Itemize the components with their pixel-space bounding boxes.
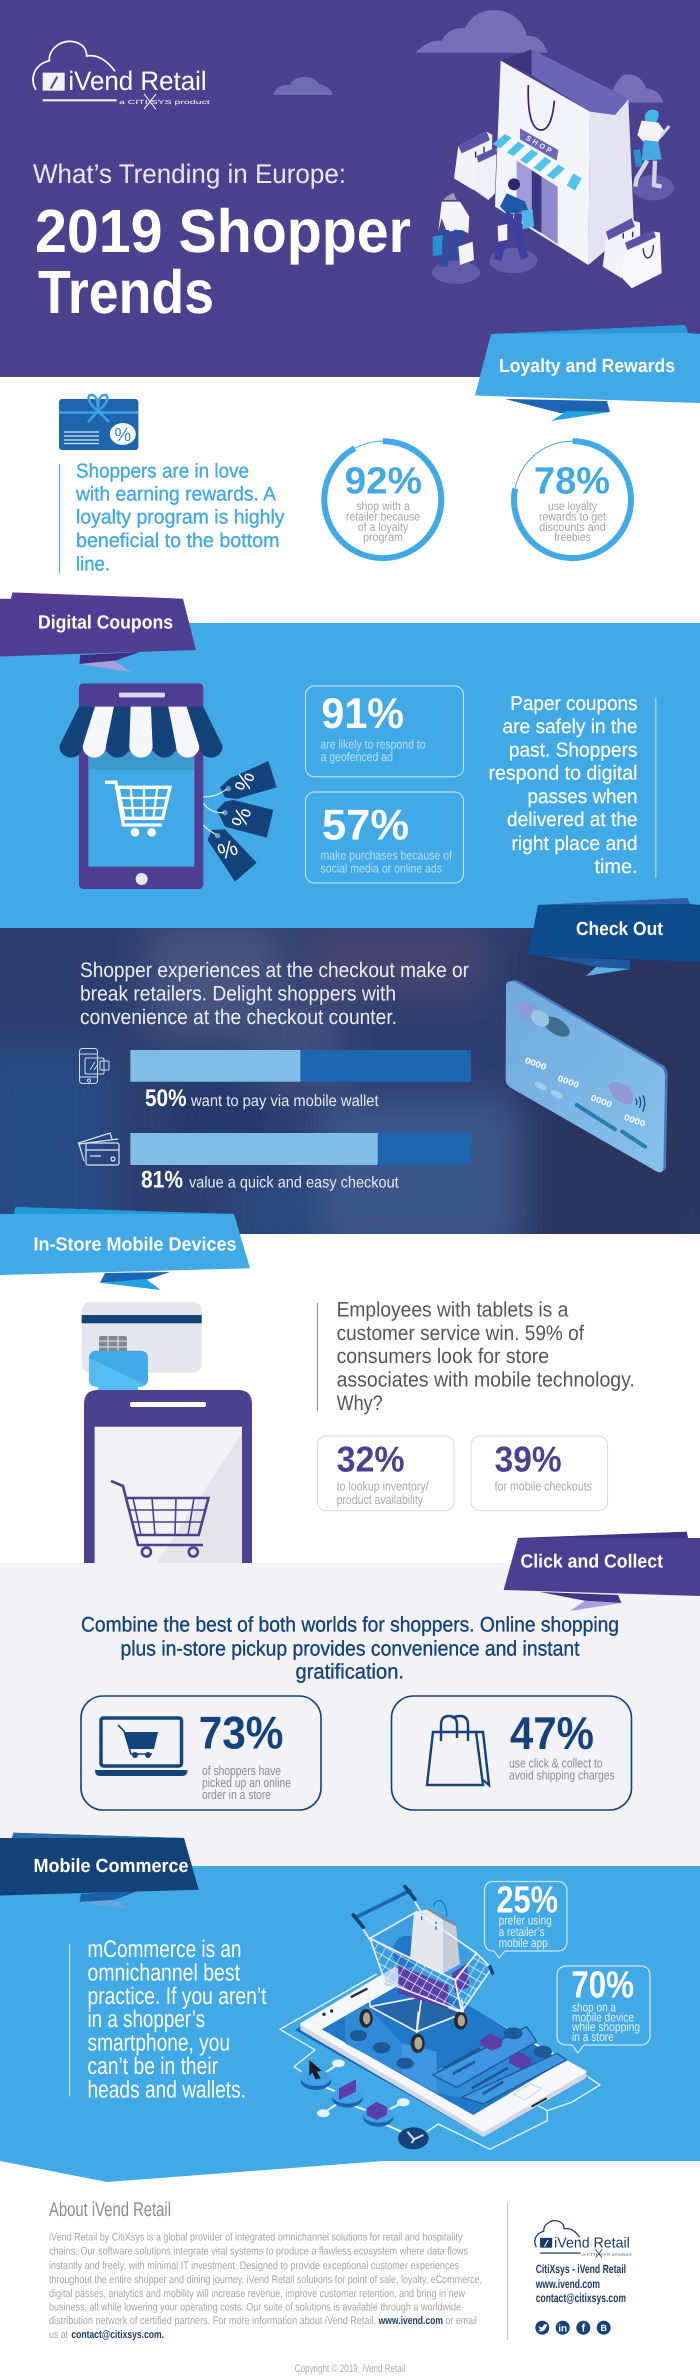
text block: checkout intro: Shopper experiences at the checkout make or	[80, 959, 469, 982]
icon: storefront phone with coupon tags: %	[230, 768, 259, 795]
ribbon: mobile commerce: Mobile Commerce	[34, 1856, 188, 1877]
stat box: 57%: make purchases because of	[320, 849, 452, 863]
icons: social media: f	[581, 2323, 585, 2335]
stat box: 47%	[392, 1696, 632, 1810]
stat box: 32%: 32%	[337, 1439, 405, 1480]
icon: storefront phone with coupon tags: %	[226, 804, 256, 831]
panel: digital coupons	[0, 592, 700, 929]
text block: loyalty intro	[60, 460, 284, 575]
illustration: credit card: 0000	[589, 1092, 613, 1109]
bar chart: 81% quick checkout: 81%	[141, 1166, 183, 1193]
callout: 70%: 70%	[571, 1964, 634, 2006]
text block: contact	[535, 2262, 626, 2305]
text block: paper coupons: are safely in the	[502, 716, 638, 738]
ribbon: in-store mobile devices	[0, 1207, 250, 1290]
text block: mCommerce: mCommerce is an	[88, 1936, 242, 1963]
stat ring: 92%: of a loyalty	[358, 520, 408, 534]
text block: contact: contact@citixsys.com	[536, 2291, 626, 2305]
illustration: credit card: 0000	[556, 1073, 580, 1090]
logo: iVend Retail	[33, 41, 210, 109]
stat ring: 92%: shop with a	[356, 499, 410, 513]
illustration: shop bag store: SHOP	[524, 134, 553, 155]
cloud small	[273, 77, 333, 95]
bar chart: 50% mobile wallet	[130, 1050, 471, 1112]
stat ring: 78%: rewards to get	[539, 510, 607, 524]
stat ring: 78%: 78%	[534, 461, 610, 503]
text block: about paragraph: business, all while lowering your operating costs. Our suite of solutions is available through a worldwide	[49, 2302, 461, 2314]
stat ring: 92%: retailer because	[346, 510, 420, 524]
panel: click and collect	[0, 1532, 700, 1866]
icons: social media	[535, 2321, 611, 2335]
stat box: 73%: order in a store	[202, 1787, 271, 1802]
text block: mCommerce: can’t be in their	[88, 2053, 218, 2080]
ribbon: check out	[528, 898, 700, 976]
stat box: 73%: 73%	[199, 1706, 284, 1758]
stat ring: 92%	[324, 441, 441, 558]
title: Trends	[38, 258, 214, 326]
callout: 25%	[484, 1879, 567, 1958]
stat box: 73%: of shoppers have	[202, 1763, 281, 1778]
text block: mCommerce: in a shopper’s	[88, 2006, 205, 2033]
ribbon: loyalty and rewards: Loyalty and Rewards	[499, 356, 675, 377]
stat box: 39%: for mobile checkouts	[495, 1479, 592, 1494]
text block: about paragraph: distribution network of certified partners. For more information about iVend Retail,	[49, 2315, 376, 2327]
stat ring: 78%: freebies	[554, 530, 591, 544]
illustration: phone with card and cart	[82, 1302, 252, 1563]
text block: mCommerce	[70, 1936, 267, 2104]
stat box: 47%: use click & collect to	[509, 1755, 603, 1770]
callout: 70%: in a store	[572, 2030, 614, 2044]
panel: check out	[0, 898, 700, 1255]
text block: about paragraph: instantly and freely, with minimal IT investment. Designed to provide exceptional customer experiences	[49, 2260, 459, 2272]
stat ring: 92%: 92%	[345, 461, 422, 503]
text block: combine best of both worlds	[81, 1614, 619, 1684]
callout: 70%	[557, 1964, 650, 2053]
stat box: 73%	[81, 1696, 321, 1810]
stat box: 91%: 91%	[321, 690, 404, 738]
illustration: credit card: 0000	[524, 1055, 548, 1072]
text block: checkout intro: convenience at the checkout counter.	[80, 1006, 397, 1029]
stat box: 91%	[306, 686, 464, 777]
stat box: 39%	[471, 1436, 608, 1511]
bar chart: 50% mobile wallet: want to pay via mobile wallet	[190, 1093, 379, 1110]
text block: paper coupons: Paper coupons	[510, 693, 638, 715]
stat ring: 78%: discounts and	[539, 520, 606, 534]
text block: paper coupons: past. Shoppers	[509, 739, 638, 761]
text block: paper coupons: delivered at the	[507, 809, 638, 831]
icon: gift card	[59, 395, 138, 450]
text block: about paragraph: or email	[446, 2315, 477, 2327]
text block: paper coupons	[488, 693, 656, 878]
text block: about paragraph: chains. Our software solutions integrate vital systems to produce a flawless ecosystem where data flows	[49, 2246, 468, 2258]
text block: employees with tablets: customer service win. 59% of	[337, 1322, 584, 1345]
subtitle: What’s Trending in Europe:	[33, 159, 346, 189]
text block: mCommerce: smartphone, you	[88, 2030, 230, 2057]
stat box: 32%: product availability	[337, 1492, 423, 1507]
illustration: credit card	[506, 980, 668, 1172]
text block: combine best of both worlds: plus in-store pickup provides convenience and instant	[120, 1637, 580, 1660]
text block: loyalty intro: loyalty program is highly	[76, 506, 284, 528]
stat box: 57%: social media or online ads	[320, 861, 442, 875]
stat box: 47%: avoid shipping charges	[509, 1767, 615, 1782]
bar chart: 81% quick checkout: value a quick and easy checkout	[189, 1174, 399, 1191]
stat ring: 78%	[514, 441, 631, 558]
ribbon: digital coupons	[0, 592, 196, 672]
text block: mCommerce: omnichannel best	[88, 1959, 240, 1986]
icon: storefront phone with coupon tags	[59, 683, 277, 889]
text block: loyalty intro: with earning rewards. A	[75, 484, 277, 506]
stat box: 32%	[318, 1436, 454, 1511]
panel: loyalty and rewards	[59, 325, 700, 575]
stat ring: 78%: use loyalty	[548, 499, 597, 513]
bar chart: 81% quick checkout	[130, 1133, 471, 1193]
text block: about paragraph: www.ivend.com	[378, 2315, 443, 2327]
logo: iVend Retail: a CITI SYS product	[119, 99, 210, 105]
stat box: 32%: to lookup inventory/	[337, 1479, 429, 1494]
icon: shopping bag	[427, 1716, 489, 1785]
text block: paper coupons: right place and	[512, 833, 638, 855]
callout: 70%: mobile device	[572, 2011, 634, 2025]
text block: loyalty intro: line.	[76, 553, 110, 575]
panel: mobile commerce	[0, 1833, 700, 2182]
ribbon: in-store mobile devices: In-Store Mobile Devices	[34, 1235, 236, 1256]
text block: checkout intro	[80, 959, 469, 1029]
ribbon: click and collect: Click and Collect	[520, 1552, 664, 1573]
callout: 70%: while shopping	[571, 2020, 640, 2034]
ribbon: loyalty and rewards	[475, 325, 700, 421]
callout: 25%: prefer using	[499, 1914, 552, 1928]
text block: paper coupons: time.	[594, 856, 638, 878]
stat box: 57%: 57%	[322, 802, 409, 850]
ribbon: click and collect	[504, 1532, 700, 1611]
text block: mCommerce: practice. If you aren’t	[88, 1983, 267, 2010]
stat box: 57%	[306, 792, 464, 883]
text block: about paragraph	[49, 2232, 482, 2341]
text block: combine best of both worlds: gratification.	[296, 1661, 404, 1684]
text block: contact: www.ivend.com	[535, 2277, 600, 2291]
text block: combine best of both worlds: Combine the best of both worlds for shoppers. Online shopping	[81, 1614, 619, 1637]
text block: employees with tablets: associates with mobile technology.	[337, 1369, 635, 1392]
text block: paper coupons: passes when	[528, 786, 638, 808]
bar chart: 50% mobile wallet: 50%	[145, 1085, 187, 1112]
panel: in-store mobile devices	[0, 1207, 635, 1563]
text block: employees with tablets: Employees with tablets is a	[337, 1299, 569, 1322]
logo: footer iVend Retail: iVend Retail	[554, 2234, 630, 2250]
text block: employees with tablets: Why?	[337, 1392, 383, 1415]
callout: 25%: a retailer’s	[499, 1925, 545, 1939]
title	[35, 197, 411, 326]
ribbon: mobile commerce	[0, 1833, 199, 1909]
text block: contact: CitiXsys - iVend Retail	[536, 2262, 626, 2276]
text block: about paragraph: us at	[49, 2329, 68, 2341]
stat box: 47%: 47%	[510, 1707, 594, 1759]
ribbon: check out: Check Out	[576, 919, 664, 940]
callout: 70%: shop on a	[572, 2001, 616, 2015]
background photo tint	[0, 925, 700, 1255]
text block: employees with tablets	[318, 1299, 635, 1415]
stat box: 91%: a geofenced ad	[320, 750, 393, 764]
heading: about: About iVend Retail	[49, 2199, 171, 2221]
text block: loyalty intro: beneficial to the bottom	[76, 530, 280, 552]
illustration: shop bag store	[416, 10, 674, 288]
title: 2019 Shopper	[35, 197, 411, 265]
ribbon: digital coupons: Digital Coupons	[38, 613, 173, 634]
icon: storefront phone with coupon tags: %	[214, 834, 241, 864]
icons: social media: in	[558, 2324, 567, 2334]
callout: 25%: mobile app	[499, 1936, 548, 1950]
text block: about paragraph: contact@citixsys.com.	[71, 2329, 164, 2341]
stat box: 39%: 39%	[495, 1439, 562, 1480]
icon: laptop with cart	[95, 1718, 188, 1776]
stat box: 91%: are likely to respond to	[320, 738, 426, 752]
text block: employees with tablets: consumers look for store	[337, 1345, 549, 1368]
stat ring: 92%: program	[363, 530, 403, 544]
text block: about paragraph: digital passes, analytics and mobility will increase revenue, improve customer retention, and bring in new	[49, 2288, 465, 2300]
icon: payment cards	[78, 1133, 119, 1165]
text block: loyalty intro: Shoppers are in love	[76, 460, 249, 482]
panel: about footer	[49, 2199, 631, 2375]
text block: mCommerce: heads and wallets.	[88, 2076, 246, 2104]
copyright: Copyright © 2019, iVend Retail	[295, 2363, 405, 2375]
callout: 25%: 25%	[496, 1879, 558, 1921]
text block: about paragraph: iVend Retail by CitiXsys is a global provider of integrated omnichannel solutions for retail and hospitality	[49, 2232, 463, 2244]
icon: mobile wallet	[80, 1048, 109, 1084]
logo: iVend Retail: iVend Retail	[68, 66, 207, 96]
text block: about paragraph: throughout the entire shopper and dining journey, iVend Retail solutions for point of sale, loyalty, eCommerce,	[49, 2274, 482, 2286]
stat box: 73%: picked up an online	[202, 1775, 291, 1790]
illustration: credit card: 0000	[623, 1112, 647, 1129]
illustration: phone with shopping cart	[280, 1887, 600, 2149]
panel: hero header	[0, 0, 700, 377]
icon: gift card: %	[114, 425, 131, 446]
text block: paper coupons: respond to digital	[488, 762, 638, 784]
text block: checkout intro: break retailers. Delight shoppers with	[80, 983, 396, 1006]
logo: footer iVend Retail: a CITI SYS product	[582, 2252, 631, 2256]
icons: social media: B	[600, 2323, 607, 2333]
logo: footer iVend Retail	[535, 2221, 631, 2258]
